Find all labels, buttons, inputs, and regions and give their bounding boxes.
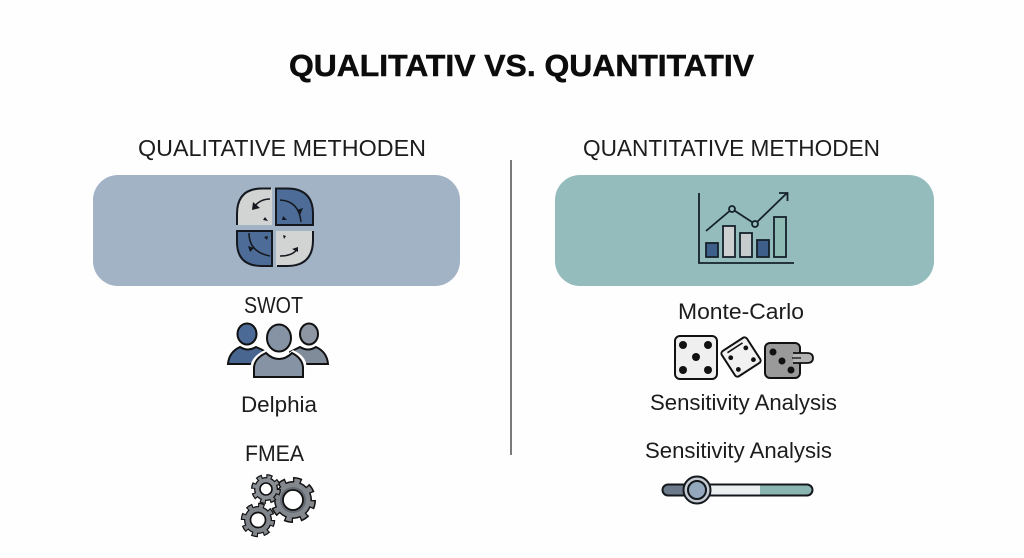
- die 3 with pointer: [765, 343, 813, 378]
- title: QUALITATIV VS. QUANTITATIV: [289, 48, 754, 83]
- die 2: [720, 336, 762, 378]
- heading: quantitative: QUANTITATIVE METHODEN: [583, 135, 880, 161]
- icon: slider: [662, 476, 812, 504]
- panel: qualitative: [93, 175, 460, 286]
- label: SWOT: SWOT: [244, 292, 303, 318]
- icon: people: [228, 324, 328, 380]
- label: Delphia: Delphia: [241, 392, 318, 417]
- panel: quantitative: [555, 175, 934, 286]
- label: Sensitivity Analysis 1: Sensitivity Analysis: [650, 390, 837, 415]
- heading: qualitative: QUALITATIVE METHODEN: [138, 135, 426, 161]
- label: Monte-Carlo: Monte-Carlo: [678, 299, 804, 324]
- label: Sensitivity Analysis 2: Sensitivity Analysis: [645, 438, 832, 463]
- icon: gears: [244, 477, 312, 534]
- label: FMEA: FMEA: [245, 441, 304, 466]
- icon: dice: [675, 336, 813, 379]
- icon: bar and line chart: [699, 193, 794, 263]
- die 1: [675, 336, 717, 379]
- icon: SWOT quadrant: [237, 188, 313, 266]
